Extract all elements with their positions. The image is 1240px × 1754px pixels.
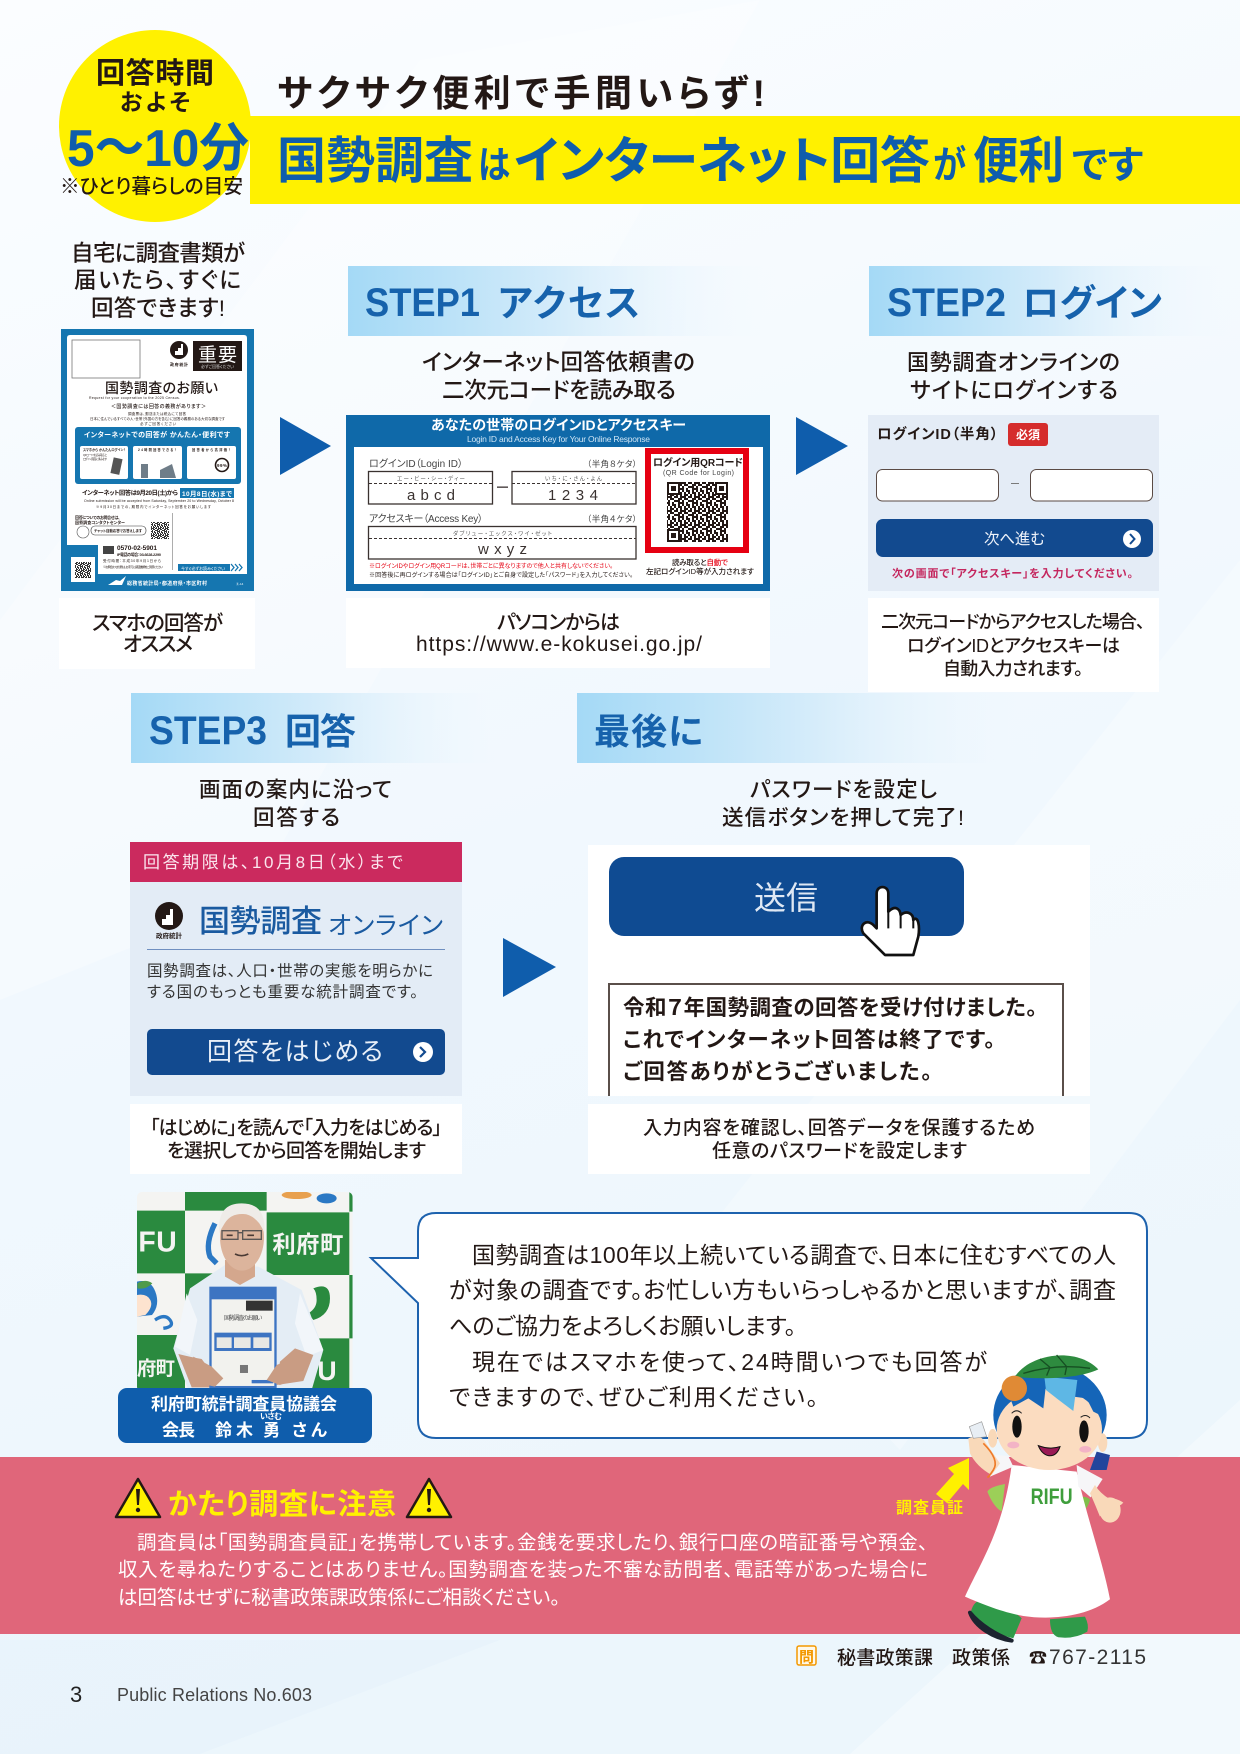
confirmation message: ご回答ありがとうございました。 [623,1059,932,1084]
title: main heading: 便利 [973,133,1064,189]
contact info: 政策係 [952,1647,1010,1669]
panel: census request document: ⑤-14 [236,581,244,586]
button: start answering [147,1029,445,1075]
panel: census request document: ＜国勢調査には回答の義務があります＞ [111,403,206,410]
text: step 1 instruction: 二次元コードを読み取る [442,378,676,403]
photo: association chairman: FU [297,1356,337,1386]
panel: fraud warning [0,1457,1240,1634]
confirmation message: 令和７年国勢調査の回答を受け付けました。 [623,995,1037,1020]
contact info: 秘書政策課 [837,1647,933,1669]
envelope [209,1287,277,1388]
caption: auto input: 自動入力されます。 [943,659,1083,679]
badge: response time: およそ [120,89,190,115]
label: inspector card: 調査員証 [896,1499,963,1517]
panel: census request document: 日本に住んでいるすべての人・世帯（外国の方を含む）に回答の義務のある大切な調査です [90,416,226,421]
arrow [796,417,848,475]
page footer: Public Relations No.603 [117,1685,312,1705]
intro text [71,241,245,321]
title: main heading [277,133,1143,189]
header title band [250,73,1240,204]
dress [965,1465,1110,1618]
badge: important: 必ずご回答ください [201,363,234,369]
panel: census online start: オンライン [328,912,443,940]
speech bubble: 現在ではスマホを使って、24時間いつでも回答が [472,1349,987,1375]
warning body text: は回答はせずに秘書政策課政策係にご相談ください。 [118,1587,560,1609]
confirmation message: これでインターネット回答は終了です。 [623,1027,995,1052]
panel: login id and access key card: （半角４ケタ） [587,514,637,524]
panel: census online start: 国勢調査 [199,904,322,939]
panel: login form: ログインID（半角） [877,425,998,443]
panel: login id and access key card: あなたの世帯のログインIDとアクセスキー [431,417,686,433]
name label: 利府町統計調査員協議会 [151,1395,337,1414]
speech bubble: できますので、ぜひご利用ください。 [449,1384,818,1410]
badge: response time: ※ひとり暮らしの目安 [60,175,243,198]
heading: finally: 最後に [594,711,703,752]
button: next [876,519,1153,557]
field: login id right: 1234 [548,487,598,504]
title: tagline: サクサク便利で手間いらず! [277,73,765,114]
heading: step 2: ログイン [1022,283,1162,324]
panel: census request document: 調査票は、郵送または税込にて回答 [128,411,186,416]
panel: census online start [130,842,462,1096]
text: step 2 instruction [907,350,1120,403]
heading: step 1 [348,266,778,336]
title: main heading: が [933,145,966,187]
panel: login id and access key card: 読み取ると自動で [672,557,728,567]
panel: census request document: Online submission will be accepted from Saturday, September 20 to Wednesday, October 8 [84,499,234,503]
panel: census request document [61,329,254,591]
speech bubble: 国勢調査は100年以上続いている調査で、日本に住むすべての人 [472,1242,1116,1268]
speech bubble: が対象の調査です。お忙しい方もいらっしゃるかと思いますが、調査 [449,1277,1116,1303]
field: login id right [512,472,636,504]
shoes [970,1600,1088,1641]
panel: census request document: ※9月30日までの、期限内でインターネット回答をお願いします [96,504,212,509]
mascot: RIFU [1031,1484,1073,1509]
panel: census request document: 国勢調査コンタクトセンター [75,519,125,525]
badge: required: 必須 [1016,427,1040,442]
intro text: 回答できます! [91,296,225,321]
panel: census request document: 今すぐ必ずお読みください [181,565,225,571]
title: main heading: 国勢調査 [277,133,473,189]
caption: smartphone recommended: オススメ [123,633,193,656]
text: step 3 instruction [199,778,392,830]
shirt [173,1265,323,1390]
panel: census request document: IP電話の場合：03-6628-2290 [117,552,161,557]
panel: internet benefits: ログイン画面に進みます [83,457,108,461]
panel: internet benefits: 99% [217,463,227,468]
field: login id right: いち・に・さん・よん [545,476,603,482]
QR code box: ログイン用QRコード [653,456,743,469]
caption: read introduction: 「はじめに」を読んで「入力をはじめる」 [150,1117,442,1139]
field: login id left: abcd [407,487,455,504]
panel: census online start: する国のもっとも重要な統計調査です。 [147,983,418,1001]
panel: login id and access key card: ※ログインIDやログイン用QRコードは、世帯ごとに異なりますので他人と共有しないでください。 [369,562,613,570]
field: access key [368,526,636,559]
caption: from a pc: パソコンからは [497,611,620,634]
caption: from a pc: https://www.e-kokusei.go.jp/ [416,633,702,656]
badge: required [1008,423,1048,446]
heading: step 1: STEP1 [365,281,480,325]
field: login id left [368,472,492,504]
name label: いさむ [260,1412,282,1421]
photo: association chairman: 国勢調査のお願い [224,1314,263,1322]
name label: 会長 [162,1421,195,1440]
name label: さん [292,1421,328,1440]
text: step 1 instruction: インターネット回答依頼書の [422,350,695,375]
panel: login id and access key card: ログインID（Login ID） [369,457,463,470]
head [988,1355,1110,1470]
panel: internet benefits: 24時間回答できる！ [138,447,176,452]
heading: finally [577,693,1047,763]
panel: census request document: 総務省統計局・都道府県・市区町村 [127,580,207,587]
intro text: 届いたら、すぐに [74,268,241,293]
mascot [965,1355,1123,1641]
icon: warning triangle right [407,1479,451,1517]
caption: from a pc [346,598,770,668]
title: main heading: は [478,145,510,187]
caption: smartphone recommended [59,598,255,669]
panel: census request document: 0570-02-5901 [117,545,157,552]
panel: census online start: 国勢調査は、人口・世帯の実態を明らかに [147,962,433,980]
heading: step 2: STEP2 [887,281,1006,325]
panel: internet benefits: QRコードを読み取ると [83,453,108,457]
caption: read introduction: を選択してから回答を開始します [167,1139,426,1162]
caption: auto input [868,598,1159,692]
warning body text [118,1532,928,1609]
field: access key: ダブリュー・エックス・ワイ・ゼット [453,530,552,538]
photo: association chairman: FU [138,1227,177,1259]
warning body text: 収入を尋ねたりすることはありません。国勢調査を装った不審な訪問者、電話等があった場合に [118,1559,928,1581]
heading: step 3: 回答 [285,711,356,752]
field: login id left: エー・ビー・シー・ディー [397,474,465,482]
right arm [1090,1485,1123,1523]
title: main heading: です [1072,145,1143,187]
photo: association chairman: 利府町 [272,1232,343,1258]
name label: 勇 [263,1421,280,1440]
panel: login form: 次の画面で「アクセスキー」を入力してください。 [892,566,1133,580]
photo: association chairman: 府町 [137,1358,175,1380]
speech bubble [371,1213,1147,1438]
panel: internet benefits [75,427,241,484]
panel: internet benefits: インターネットでの回答が かんたん・便利です [84,430,230,439]
head [225,1260,255,1285]
panel: census request document: 回答についてのお問合せは、 [75,514,120,520]
arrow [280,417,331,475]
button: next: 次へ進む [984,530,1045,548]
badge: response time: 5〜10分 [67,120,249,178]
panel: submit button and confirmation [588,845,1090,1096]
panel: login id and access key card: ※回答後に再ログインする場合は「ログインID」とご自身で設定した「パスワード」を入力してください。 [369,571,633,579]
caption: set password: 入力内容を確認し、回答データを保護するため [643,1116,1035,1139]
intro text: 自宅に調査書類が [71,241,245,266]
title: main heading: インターネット回答 [514,133,930,189]
icon: pointing hand [862,887,919,955]
panel: census request document: 受付時間：平成30年9月1日から [103,558,161,563]
confirmation message [609,984,1063,1096]
icon: statistics logo: 政府統計 [170,361,188,367]
speech bubble: へのご協力をよろしくお願いします。 [449,1313,796,1339]
contact info: 767-2115 [1049,1646,1146,1669]
panel: census request document: Request for your cooperation to the 2025 Census. [89,396,180,400]
text: final instruction: パスワードを設定し [750,778,937,802]
badge: response time: 回答時間 [96,57,214,90]
text: final instruction: 送信ボタンを押して完了! [722,806,964,830]
text: step 1 instruction [422,350,695,403]
text: step 2 instruction: 国勢調査オンラインの [907,350,1120,375]
icon: inquiry: 問 [799,1649,814,1666]
button: send [609,857,964,936]
icon: statistics logo: 政府統計 [156,931,182,940]
label: inspector card [896,1458,969,1517]
QR code box [648,451,746,550]
icon: inquiry [797,1646,816,1666]
panel: login id and access key card: 左記ログインID等が入力されます [646,566,754,576]
panel: login id and access key card [346,415,770,591]
text: step 3 instruction: 画面の案内に沿って [199,778,392,802]
page footer [70,1682,312,1707]
heading: step 3: STEP3 [149,709,267,753]
name label [118,1388,372,1443]
panel: census request document: インターネット回答は9月20日(土)から [82,489,178,497]
caption: read introduction [130,1104,462,1174]
heading: warning: かたり調査に注意 [168,1488,396,1521]
panel: login id and access key card: （半角８ケタ） [587,459,637,469]
panel: census request document: 10月8日(水)まで [182,489,233,498]
panel: login id and access key card: アクセスキー（Access Key） [369,513,483,525]
caption: set password: 任意のパスワードを設定します [712,1140,967,1162]
photo: association chairman [137,1191,353,1393]
text: step 2 instruction: サイトにログインする [910,378,1118,403]
left arm with card [968,1422,1013,1477]
icon: statistics logo [155,902,183,940]
panel: census online start: 回答期限は、10月8日（水）まで [143,852,403,872]
panel: census request document: 国勢調査のお願い [105,380,219,396]
caption: set password [588,1104,1090,1174]
QR card [71,557,95,582]
name label: 鈴木 [215,1421,253,1440]
heading: step 2 [869,266,1240,336]
button: start answering: 回答をはじめる [207,1038,383,1066]
QR code box: (QR Code for Login) [663,470,734,477]
badge: important [193,341,242,371]
icon: statistics logo [170,341,188,367]
contact info: ☎ [1029,1648,1047,1668]
heading: step 3 [131,693,521,763]
text: step 3 instruction: 回答する [253,806,340,830]
panel: internet benefits: 回答者から高評価！ [192,447,230,452]
arrow [503,938,556,997]
heading: step 1: アクセス [498,283,640,324]
panel: login form [868,415,1159,591]
panel: census request document: チャット自動応答でお答えします [94,528,143,533]
field: access key: wxyz [477,541,527,558]
page footer: 3 [70,1682,82,1707]
icon: warning triangle left [116,1479,160,1517]
warning body text: 調査員は「国勢調査員証」を携帯しています。金銭を要求したり、銀行口座の暗証番号や預金、 [137,1532,928,1554]
panel: internet benefits: スマホから かんたんログイン！ [83,447,125,452]
badge: important: 重要 [198,344,237,366]
contact info [797,1646,1146,1669]
panel: login id and access key card: Login ID and Access Key for Your Online Response [467,434,650,444]
caption: smartphone recommended: スマホの回答が [92,611,224,635]
caption: auto input: 二次元コードからアクセスした場合、 [881,612,1145,632]
caption: auto input: ログインIDとアクセスキーは [907,636,1120,656]
text: final instruction [722,778,964,830]
badge: response time [59,30,251,222]
button: send: 送信 [754,880,818,916]
panel: census request document: ※お問合わせの際は、お手元に調査書類をご用意ください [103,564,163,569]
panel: census request document: 必ずご回答ください [140,421,177,426]
